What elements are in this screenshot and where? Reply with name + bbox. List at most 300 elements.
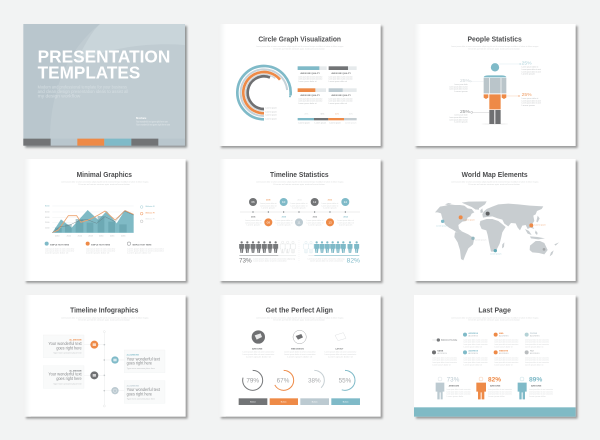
timeline captions: Lorem ipsum dolor sit <box>245 221 262 224</box>
text card 3: ALL AWESOME <box>127 354 140 357</box>
column: teal: Lorem ipsum dolor sit amet consectetur <box>45 248 75 251</box>
intro text: Lorem ipsum dolor sit amet consectetur adipiscing elit sed do eiusmod tempor incididunt ut labore et dolore magna <box>256 45 344 48</box>
timeline captions: Lorem ipsum <box>323 207 337 210</box>
stat block: teal: Lorem ipsum dolor sit <box>298 80 317 83</box>
timeline captions: Lorem ipsum dolor sit <box>276 221 293 224</box>
timeline nodes: 10 <box>282 200 286 204</box>
button: teal <box>331 398 360 405</box>
panel: last page <box>414 295 578 419</box>
area and line chart: 4000 <box>45 217 50 219</box>
contact grid: ADDRESS <box>468 350 479 353</box>
donut: 38% <box>304 370 324 390</box>
stat block: orange: Lorem ipsum dolor sit <box>298 102 317 105</box>
callout: head 25%: Lorem ipsum <box>522 73 535 76</box>
segmented bar: 40% <box>335 113 339 115</box>
stat block: orange: Lorem ipsum dolor sit amet consectetur <box>298 100 323 103</box>
callout: hips 25%: 25% <box>522 92 532 98</box>
people stat: 73% <box>239 241 296 265</box>
person stat: 89%: Lorem ipsum dolor sit amet consectetur <box>529 393 553 396</box>
segmented bar: Lorem ipsum <box>345 121 357 124</box>
marker: South America: Lorem ipsum <box>475 239 487 242</box>
timeline captions: Lorem ipsum dolor sit <box>276 219 293 222</box>
callout: legs 25%: Lorem ipsum <box>454 121 468 124</box>
person stat: 82%: Lorem ipsum dolor sit amet consectetur <box>488 388 512 391</box>
panel: get the perfect align <box>219 295 383 419</box>
icon feature: filled: AWESOME <box>252 347 263 350</box>
people stat: 82%: Lorem ipsum dolor sit amet consectetur adipiscing <box>308 257 344 260</box>
text card 4: Type more awesome place here <box>127 398 156 401</box>
person stat: 82%: AWESOME <box>490 385 501 388</box>
segmented bar <box>298 113 357 124</box>
cover description: and clean design presentation ideas to assist all <box>38 89 128 94</box>
stat block: blue grey: Lorem ipsum dolor sit <box>329 102 347 105</box>
callout: hips 25%: Lorem ipsum dolor sit <box>522 97 539 100</box>
callout: head 25%: 25% <box>522 61 532 67</box>
chart legend: Website Fl <box>145 205 155 208</box>
text card 4 <box>124 381 165 403</box>
heading: People Statistics <box>467 36 522 43</box>
person stat: 89% <box>518 377 553 399</box>
contact grid: NAME <box>437 350 444 353</box>
intro text: Lorem ipsum dolor sit amet consectetur adipiscing elit sed do eiusmod tempor incididunt ut labore et dolore magna <box>451 180 539 183</box>
intro text: Ut enim ad minim veniam quis nostrud exercitation <box>468 183 520 186</box>
intro text: Lorem ipsum dolor sit amet consectetur adipiscing elit sed do eiusmod tempor incididunt ut labore et dolore magna <box>451 45 539 48</box>
column: orange: Lorem ipsum dolor sit amet consectetur <box>86 248 116 251</box>
panel: cover slide <box>23 24 187 148</box>
stat block: blue grey: Lorem ipsum dolor sit amet consectetur <box>329 97 353 100</box>
column: grey: SIMPLE TEXT HERE <box>132 244 152 246</box>
person stat: 73%: Lorem ipsum dolor sit amet consectetur <box>447 388 471 391</box>
person stat: 73%: AWESOME <box>449 385 460 388</box>
timeline captions: Lorem ipsum dolor sit <box>337 221 354 224</box>
stat block: teal: Lorem ipsum dolor sit amet consectetur <box>298 78 323 81</box>
area and line chart: 2014 <box>99 235 104 237</box>
contact grid: Lorem ipsum dolor sit <box>432 363 451 366</box>
area and line chart: 2012 <box>78 235 82 237</box>
marker: North America west: Lorem ipsum <box>436 225 448 228</box>
column: orange: Lorem ipsum dolor sit <box>86 252 110 255</box>
chart legend: Website Fl <box>145 211 155 214</box>
text card 2: goes right here <box>56 376 82 381</box>
contact grid: Lorem ipsum dolor sit amet consectetur <box>432 361 457 364</box>
contact grid: Lorem ipsum dolor sit amet consectetur <box>464 338 488 341</box>
icon feature: plain <box>325 333 357 358</box>
text card 1: ALL AWESOME <box>69 339 83 342</box>
intro text: Lorem ipsum dolor sit amet consectetur adipiscing elit sed do eiusmod tempor incididunt ut labore et dolore magna <box>451 316 539 319</box>
text card 4: goes right here <box>127 391 153 396</box>
segmented bar: Lorem ipsum <box>329 121 341 124</box>
cover description: my design workflow <box>38 94 81 99</box>
marker: South America <box>471 237 487 242</box>
person stat: 89%: Lorem ipsum dolor sit amet consectetur <box>529 390 553 393</box>
contact grid: Lorem ipsum dolor sit amet consectetur <box>432 359 457 362</box>
text card 1: goes right here <box>56 345 82 350</box>
contact grid: ADDRESS <box>468 352 479 355</box>
heading: World Map Elements <box>462 172 528 179</box>
icon feature: outlined: Lorem ipsum dolor sit amet consectetur <box>284 351 316 354</box>
intro text: Ut enim ad minim veniam quis nostrud exercitation <box>273 319 325 322</box>
timeline captions: Lorem ipsum dolor sit <box>322 204 339 207</box>
column: teal: Lorem ipsum dolor sit amet consectetur <box>45 250 75 253</box>
area and line chart: 8000 <box>45 206 50 208</box>
intro text: Ut enim ad minim veniam quis nostrud exercitation <box>468 47 520 50</box>
stat block: orange <box>298 88 326 105</box>
world map <box>435 201 559 260</box>
panel: minimal graphics <box>24 159 188 283</box>
intro text <box>61 316 149 322</box>
timeline captions: Lorem ipsum <box>308 224 322 227</box>
heading: Last Page <box>478 308 511 315</box>
contact grid: Lorem ipsum dolor sit amet consectetur <box>464 343 488 346</box>
stat block: grey: Lorem ipsum dolor sit <box>329 80 347 83</box>
circle graph: Lorem ipsum <box>265 110 277 113</box>
marker: North America east <box>459 215 475 221</box>
contact grid: Lorem ipsum dolor sit amet consectetur <box>494 359 519 362</box>
contact grid: Lorem ipsum dolor sit <box>464 345 482 348</box>
intro text: Lorem ipsum dolor sit amet consectetur adipiscing elit sed do eiusmod tempor incididunt ut labore et dolore magna <box>256 316 344 319</box>
contact grid: Lorem ipsum dolor sit <box>525 363 544 366</box>
icon feature: plain: Lorem ipsum dolor sit amet consectetur <box>325 353 357 356</box>
timeline captions: Lorem ipsum <box>339 224 353 227</box>
donut: 79%: 79% <box>246 378 259 385</box>
cover credits <box>136 118 170 127</box>
icon feature: filled: Lorem ipsum dolor sit <box>246 355 272 358</box>
intro text <box>451 316 539 322</box>
text card 4: Your wonderful text <box>127 387 161 392</box>
person stat: 89%: Lorem ipsum dolor sit amet consectetur <box>529 388 553 391</box>
contact grid: Lorem ipsum dolor sit <box>494 363 513 366</box>
icon feature: outlined <box>284 330 316 358</box>
timeline captions: Lorem ipsum dolor sit <box>307 221 324 224</box>
column: orange: Lorem ipsum dolor sit amet consectetur <box>86 250 116 253</box>
marker: North America west <box>436 220 448 228</box>
contact grid: Lorem ipsum dolor sit amet consectetur <box>525 359 549 362</box>
cover description: Modern and professional template for your business <box>38 84 127 89</box>
text card 3: Your wonderful text <box>127 356 161 361</box>
contact grid: Lorem ipsum dolor sit amet consectetur <box>494 361 519 364</box>
footer band <box>414 407 576 417</box>
cover description <box>38 84 128 99</box>
circle graph: Lorem ipsum <box>265 117 277 120</box>
text card 3 <box>124 350 165 373</box>
panel: timeline infographics <box>24 295 188 419</box>
callout: legs 25%: 25% <box>460 109 471 115</box>
icon feature: plain: Lorem ipsum dolor sit <box>328 355 354 358</box>
intro text: Ut enim ad minim veniam quis nostrud exercitation <box>273 47 325 50</box>
timeline nodes: 11 <box>297 220 301 224</box>
timeline captions: 2013 <box>328 199 333 201</box>
timeline captions: Lorem ipsum <box>247 224 260 227</box>
heading: Circle Graph Visualization <box>258 36 341 43</box>
timeline nodes: 13 <box>328 220 332 224</box>
contact grid: ADDRESS <box>499 334 509 337</box>
intro text <box>256 45 344 50</box>
cover title: PRESENTATION <box>38 47 170 67</box>
cover credits: Your wonderful text goes right here now <box>136 124 170 127</box>
area and line chart: 2013 <box>88 235 94 237</box>
circle graph <box>237 66 291 120</box>
text card 2: Your wonderful text <box>48 372 82 377</box>
people stat: 82%: Lorem ipsum dolor sit amet consectetur <box>310 260 344 263</box>
person stat: 73% <box>436 377 471 399</box>
circle graph: Lorem ipsum <box>265 107 277 110</box>
person stat: 82%: 82% <box>488 377 501 384</box>
icon feature: filled: Lorem ipsum dolor sit amet consectetur <box>243 353 275 356</box>
area and line chart: 2010 <box>55 235 60 237</box>
column: grey <box>127 242 164 255</box>
contact grid: Lorem ipsum dolor sit amet consectetur <box>432 356 457 359</box>
cover credits: Brochure <box>136 118 147 120</box>
logo: BROCHURE <box>441 338 458 342</box>
callout: torso 25% <box>449 78 484 93</box>
area and line chart <box>45 206 134 237</box>
segmented bar: 20% <box>304 113 309 115</box>
callout: torso 25%: Lorem ipsum dolor sit amet <box>449 88 468 91</box>
node: blue grey <box>111 387 119 394</box>
stat block: grey <box>329 66 357 83</box>
contact grid: ADDRESS <box>468 332 479 335</box>
contact grid: PHONE <box>530 333 538 335</box>
icon feature: plain: Lorem ipsum dolor sit amet consectetur <box>325 351 357 354</box>
timeline captions: Lorem ipsum <box>292 207 306 210</box>
callout: torso 25%: 25% <box>460 78 471 84</box>
contact grid: WEBSITE <box>499 351 509 353</box>
marker: Europe <box>486 212 490 216</box>
stat block: grey: Lorem ipsum dolor sit amet consectetur <box>329 78 353 81</box>
stat block: blue grey: AWESOME QUALITY <box>331 94 352 97</box>
button: blue grey: Button <box>312 400 318 403</box>
contact grid: Lorem ipsum dolor sit amet consectetur <box>464 341 488 344</box>
area and line chart: 6000 <box>45 212 50 214</box>
timeline captions: Lorem ipsum dolor sit <box>307 219 324 222</box>
contact grid: ADDRESS <box>468 334 479 337</box>
stat block: grey: Lorem ipsum dolor sit amet consectetur <box>329 75 353 78</box>
callout: hips 25%: Lorem ipsum <box>522 104 535 107</box>
text card 3: Type more awesome place here <box>127 367 156 370</box>
contact grid: ADDRESS <box>437 352 448 355</box>
people stat: 82%: 82% <box>347 258 360 265</box>
callout: legs 25%: Lorem ipsum dolor <box>454 114 468 117</box>
marker: Asia: Lorem ipsum <box>534 224 546 227</box>
stat block: teal <box>298 66 327 83</box>
person stat: 82% <box>476 377 512 399</box>
cover title: TEMPLATES <box>38 63 140 83</box>
person stat: 73%: Lorem ipsum dolor <box>447 395 464 398</box>
icon feature: filled <box>243 330 275 358</box>
contact grid: Lorem ipsum dolor sit amet consectetur <box>494 343 519 346</box>
timeline captions: Lorem ipsum dolor sit <box>245 219 262 222</box>
node: teal <box>111 356 119 364</box>
person stat: 89%: Lorem ipsum dolor <box>529 395 546 398</box>
timeline captions: 2014 <box>343 215 349 218</box>
callout: head 25%: Lorem ipsum dolor sit amet <box>522 68 541 71</box>
contact grid: ADDRESS <box>530 334 540 337</box>
column: grey: Lorem ipsum dolor sit amet consectetur <box>127 248 164 251</box>
column: teal <box>45 242 75 255</box>
callout: legs 25%: Lorem ipsum dolor sit amet <box>449 116 468 119</box>
marker: South Africa <box>490 249 502 256</box>
callout: hips 25%: Lorem ipsum dolor sit amet <box>522 102 541 105</box>
timeline captions: Lorem ipsum dolor sit <box>260 202 277 205</box>
panel: circle graph visualization <box>219 24 383 148</box>
icon feature: outlined: WEB DESIGN <box>291 348 304 350</box>
contact grid: Lorem ipsum dolor sit <box>494 345 513 348</box>
marker: Asia <box>529 223 546 227</box>
button: teal: Button <box>343 400 349 403</box>
timeline nodes: 06 <box>251 200 255 204</box>
intro text <box>451 180 539 186</box>
text card 2: Type more awesome place here <box>53 383 83 386</box>
chart legend: Website Fl <box>145 218 155 221</box>
callout: head 25% <box>499 61 541 76</box>
contact grid: Lorem ipsum dolor sit amet consectetur <box>494 338 519 341</box>
button: orange: Button <box>281 400 287 403</box>
callout: torso 25%: Lorem ipsum <box>454 90 468 93</box>
callout: torso 25%: Lorem ipsum dolor sit amet <box>449 85 468 88</box>
donut: 67%: 67% <box>277 378 290 385</box>
contact grid: Lorem ipsum dolor sit amet consectetur <box>494 341 519 344</box>
column: teal: Lorem ipsum dolor sit <box>45 252 69 255</box>
intro text: Ut enim ad minim veniam quis nostrud exercitation <box>273 183 325 186</box>
intro text: Lorem ipsum dolor sit amet consectetur adipiscing elit sed do eiusmod tempor incididunt ut labore et dolore magna <box>256 180 344 183</box>
marker: North America east: Lorem ipsum <box>463 218 475 221</box>
person stat: 89%: 89% <box>529 377 543 384</box>
person stat: 73%: 73% <box>447 377 460 384</box>
segmented bar: 30% <box>320 113 325 115</box>
person stat: 73%: Lorem ipsum dolor sit amet consectetur <box>447 393 471 396</box>
timeline nodes: 12 <box>313 200 317 204</box>
donut: 55% <box>335 370 355 390</box>
person stat: 82%: Lorem ipsum dolor sit amet consectetur <box>488 390 512 393</box>
timeline captions: 2011 <box>297 199 302 201</box>
stat block: orange: AWESOME QUALITY <box>300 94 321 97</box>
timeline captions: Lorem ipsum <box>262 207 275 210</box>
intro text <box>256 180 344 186</box>
donut: 79% <box>243 370 263 390</box>
contact grid: Lorem ipsum dolor sit amet consectetur <box>525 341 549 344</box>
intro text: Lorem ipsum dolor sit amet consectetur adipiscing elit sed do eiusmod tempor incididunt ut labore et dolore magna <box>61 180 149 183</box>
person stat: 82%: Lorem ipsum dolor sit amet consectetur <box>488 393 512 396</box>
contact grid: FAX <box>530 350 535 353</box>
intro text: Ut enim ad minim veniam quis nostrud exercitation <box>468 319 520 322</box>
text card 1: Type more awesome place here <box>53 352 83 355</box>
column: teal: SIMPLE TEXT HERE <box>50 244 70 246</box>
button: grey: Button <box>250 400 256 403</box>
segmented bar: Lorem ipsum <box>298 121 310 124</box>
intro text <box>61 180 149 186</box>
timeline captions: 2012 <box>313 216 318 218</box>
text card 2 <box>43 366 84 388</box>
cover colour bars <box>23 139 158 146</box>
contact grid: Lorem ipsum dolor sit <box>525 345 544 348</box>
node: dark <box>90 371 98 379</box>
timeline captions: Lorem ipsum dolor sit <box>291 202 308 205</box>
callout: legs 25% <box>449 109 489 124</box>
contact grid: Lorem ipsum dolor sit amet consectetur <box>525 356 549 359</box>
text card 1: Your wonderful text <box>48 341 82 346</box>
stat block: blue grey: Lorem ipsum dolor sit amet consectetur <box>329 100 353 103</box>
segmented bar: Lorem ipsum <box>315 121 326 124</box>
donut: 67% <box>274 370 294 390</box>
timeline captions: Lorem ipsum dolor sit <box>291 204 308 207</box>
area and line chart: 2000 <box>45 222 50 224</box>
timeline captions <box>245 199 354 227</box>
button: grey <box>239 398 267 405</box>
stat block: teal: Lorem ipsum dolor sit amet consectetur <box>298 75 323 78</box>
intro text <box>451 45 539 50</box>
logo <box>432 338 458 342</box>
person stat: 73%: Lorem ipsum dolor sit amet consectetur <box>447 390 471 393</box>
contact grid <box>432 332 549 366</box>
column: orange <box>86 242 116 255</box>
panel: world map elements <box>414 159 578 283</box>
column: orange: SIMPLE TEXT HERE <box>91 244 111 246</box>
stat block: orange: Lorem ipsum dolor sit amet consectetur <box>298 97 323 100</box>
marker: South Africa: Lorem ipsum <box>490 253 502 256</box>
contact grid: Lorem ipsum dolor sit amet consectetur <box>494 356 519 359</box>
area and line chart: 2016 <box>121 235 126 237</box>
person stat: 89%: AWESOME <box>531 385 542 388</box>
circle graph: Lorem ipsum <box>265 114 277 117</box>
stat block: blue grey <box>329 88 357 105</box>
callout: head 25%: Lorem ipsum dolor sit <box>522 66 539 69</box>
contact grid: Lorem ipsum dolor sit amet consectetur <box>525 361 549 364</box>
callout: legs 25%: Lorem ipsum dolor sit amet <box>449 118 468 121</box>
timeline captions: Lorem ipsum dolor sit <box>337 219 354 222</box>
timeline captions: Lorem ipsum dolor sit <box>260 204 277 207</box>
heading: Get the Perfect Align <box>266 308 333 315</box>
stat block: teal: AWESOME QUALITY <box>300 72 321 75</box>
area and line chart: 2015 <box>110 235 115 237</box>
timeline nodes <box>249 198 349 226</box>
timeline axis <box>240 211 360 213</box>
marker: Australia <box>543 248 545 251</box>
contact grid: Lorem ipsum dolor sit amet consectetur <box>464 359 488 362</box>
intro text: Ut enim ad minim veniam quis nostrud exercitation <box>78 319 130 322</box>
heading: Timeline Statistics <box>270 172 329 179</box>
vertical divider <box>298 240 300 262</box>
callout: hips 25% <box>507 92 541 107</box>
people stat: 73%: 73% <box>239 258 252 265</box>
text card 4: ALL AWESOME <box>127 384 140 387</box>
intro text: Lorem ipsum dolor sit amet consectetur adipiscing elit sed do eiusmod tempor incididunt ut labore et dolore magna <box>61 316 149 319</box>
callout: torso 25%: Lorem ipsum dolor <box>454 83 468 86</box>
node: orange <box>90 341 98 349</box>
timeline captions: Lorem ipsum <box>277 224 291 227</box>
callout: head 25%: Lorem ipsum dolor sit amet <box>522 70 541 73</box>
icon feature: outlined: Lorem ipsum dolor sit <box>287 355 313 358</box>
area and line chart: 1000 <box>45 227 50 229</box>
timeline captions: 2010 <box>282 216 287 218</box>
people stat: 73%: Lorem ipsum dolor sit amet consectetur <box>253 260 287 263</box>
column: grey: Lorem ipsum dolor sit <box>127 252 151 255</box>
donut: 38%: 38% <box>308 378 321 385</box>
people stat: 73%: Lorem ipsum dolor sit amet consectetur adipiscing <box>253 257 295 260</box>
button: orange <box>270 398 298 405</box>
contact grid: ADDRESS <box>499 352 509 355</box>
contact grid: Lorem ipsum dolor sit amet consectetur <box>464 361 488 364</box>
heading: Timeline Infographics <box>70 308 139 315</box>
person stat: 82%: Lorem ipsum dolor <box>488 395 505 398</box>
column: grey: Lorem ipsum dolor sit amet consectetur <box>127 250 164 253</box>
timeline captions: 2006 <box>251 216 256 218</box>
text card 1 <box>43 335 84 358</box>
chart legend <box>140 205 155 223</box>
vertical timeline <box>84 331 124 407</box>
contact grid: Lorem ipsum dolor sit amet consectetur <box>525 343 549 346</box>
cover credits: Your wonderful text goes right here now <box>136 120 168 123</box>
segmented person figure <box>482 63 508 125</box>
